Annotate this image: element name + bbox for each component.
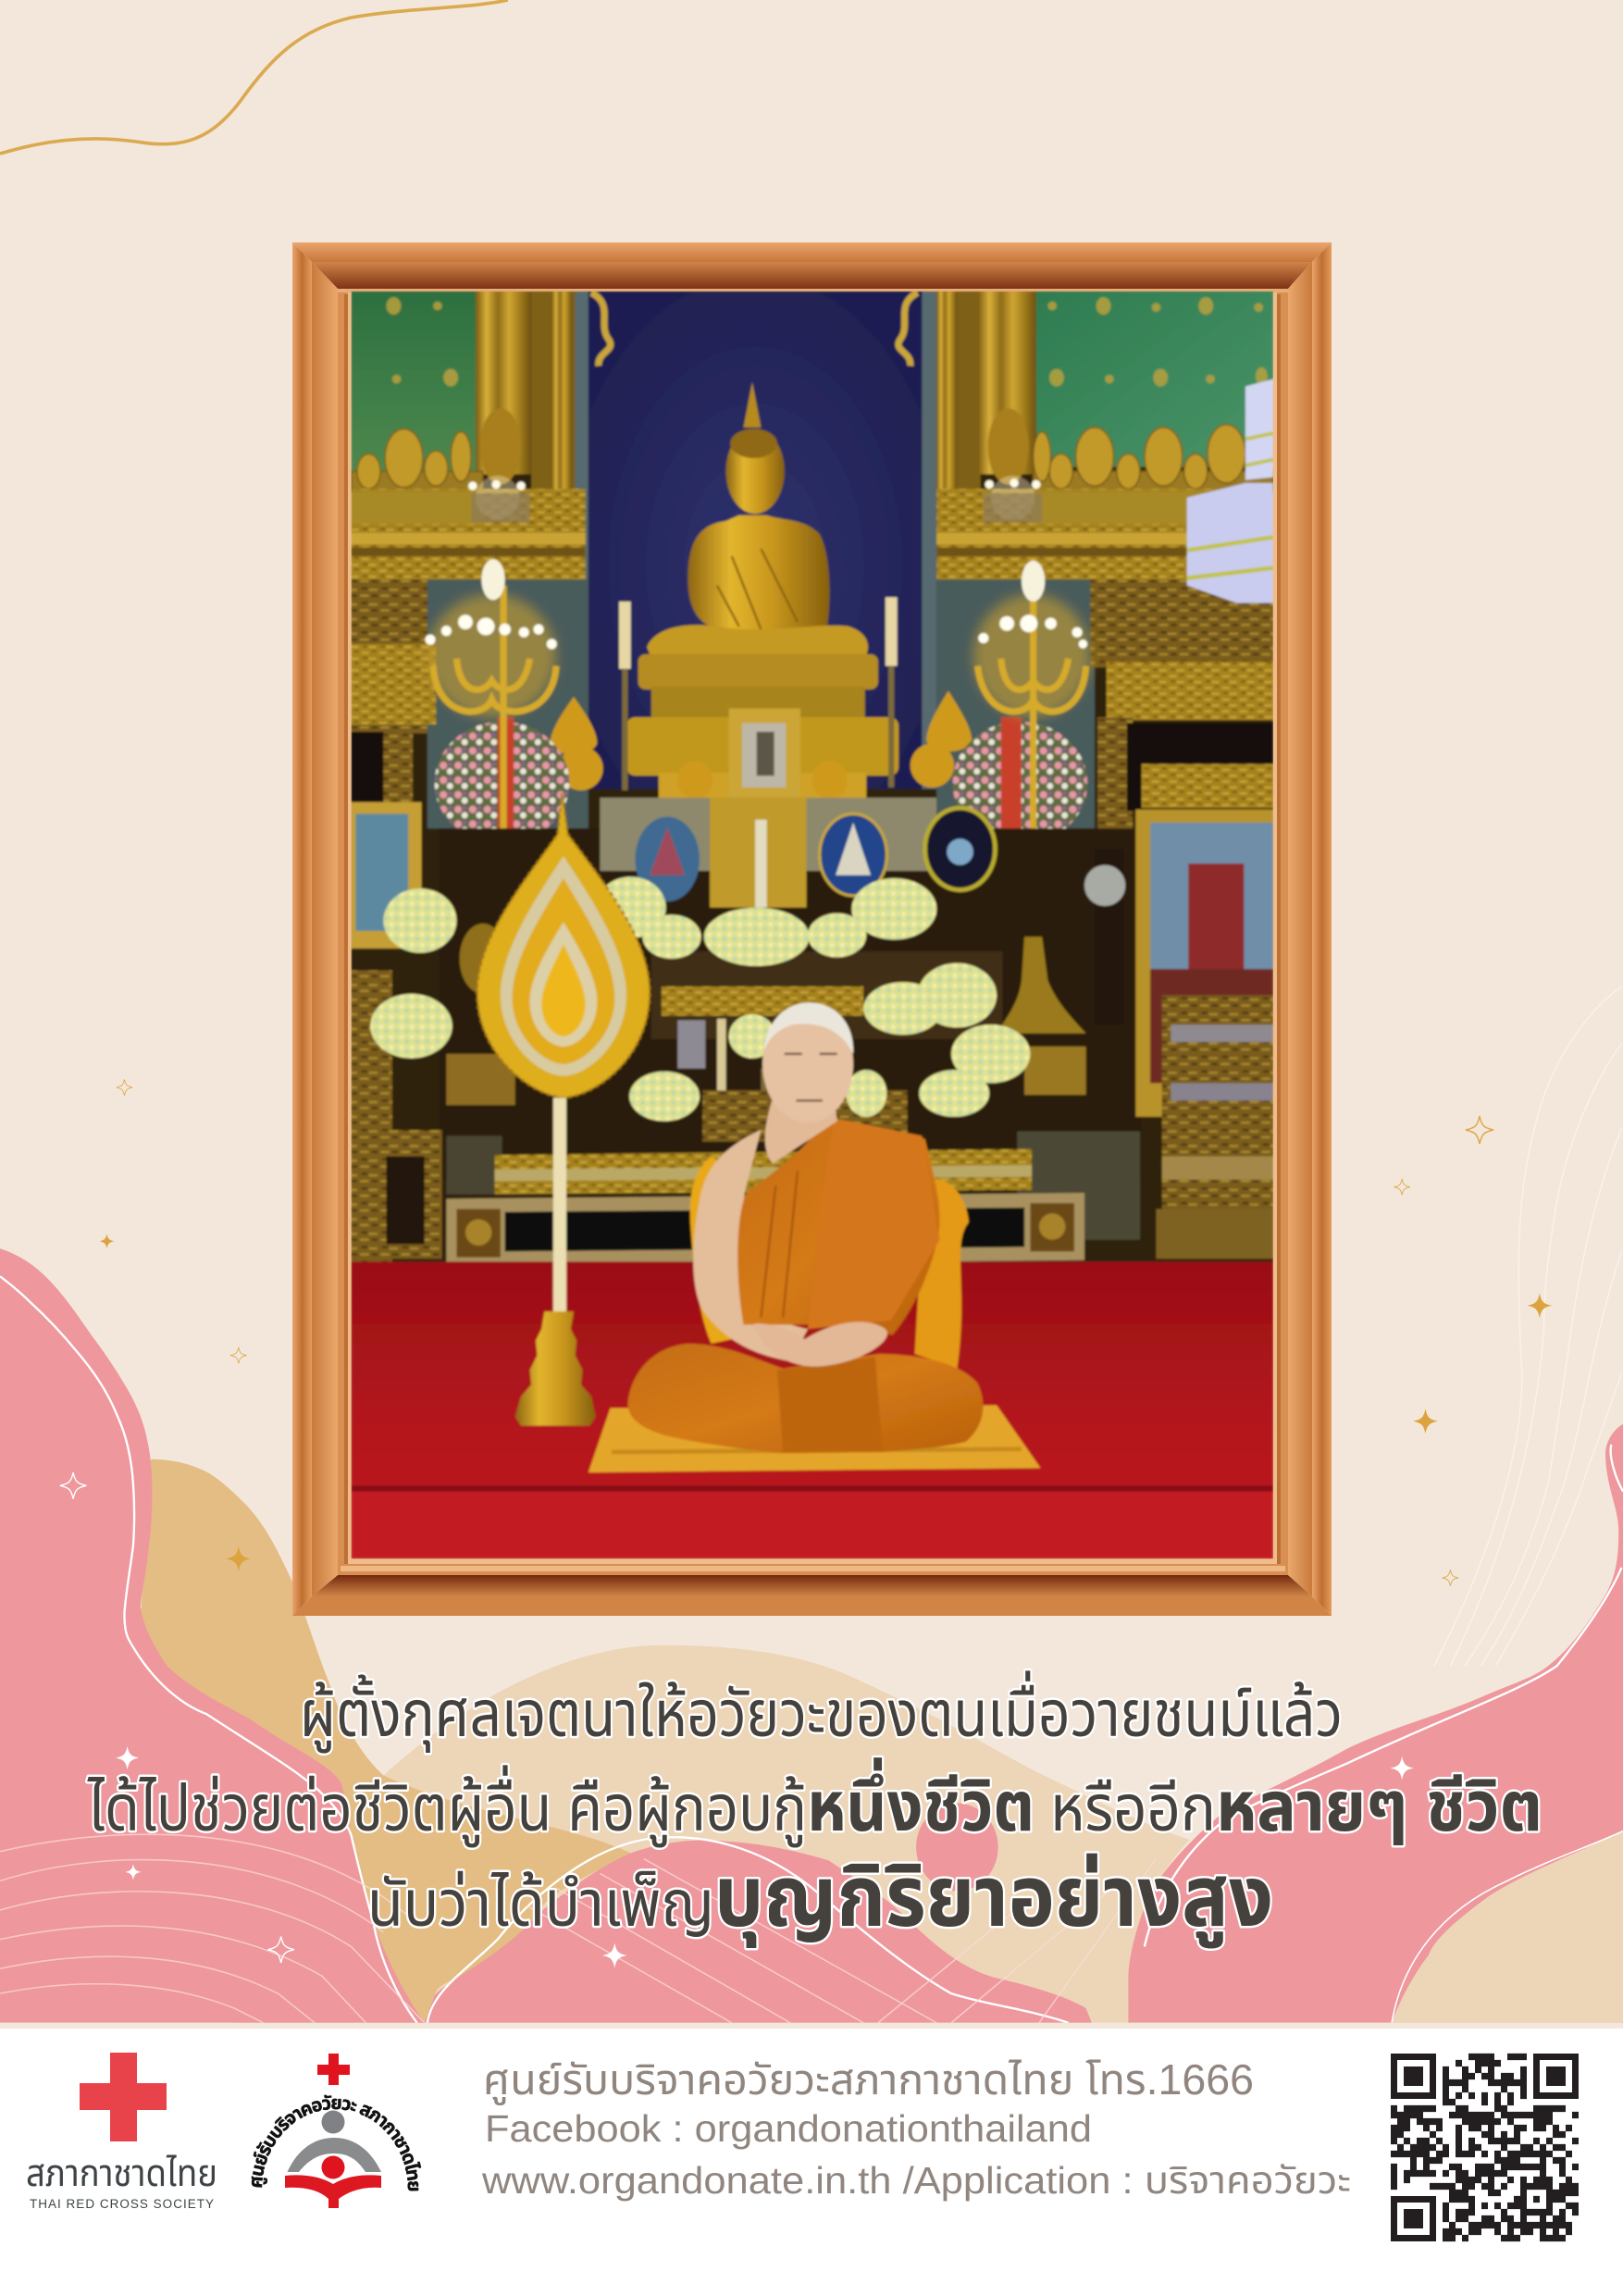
flower arrangements: [435, 722, 1087, 845]
beige hump: [383, 1645, 1190, 2023]
faint right contour lines: [1434, 987, 1621, 1666]
pink right blob: [1128, 1424, 1623, 2023]
outer bevel: [292, 242, 1332, 262]
altar step: [495, 1149, 1032, 1195]
right chandelier stand: [997, 937, 1086, 1034]
temple photograph with seated monk: [352, 292, 1273, 1558]
bottom-left concentric arcs: [0, 1834, 1156, 2023]
English name: THAI RED CROSS SOCIETY: [30, 2197, 214, 2211]
robe torso: [737, 1120, 939, 1334]
logo: Organ Donation Centre: [252, 2054, 422, 2208]
middle bevel: [312, 262, 1312, 289]
red figure and book: [322, 2156, 344, 2178]
head: [765, 1098, 837, 1163]
low ornate platform: [446, 1193, 1084, 1266]
lower altar dark backdrop: [439, 798, 1142, 1240]
logo: Thai Red Cross Society: [26, 2053, 217, 2211]
message line 3: [367, 1850, 1273, 1949]
gold outlined sparkles: [117, 1079, 1493, 1586]
white curve lines: [0, 1276, 1623, 2023]
fan pole and base: [515, 1098, 596, 1425]
contact line 1: ศูนย์รับบริจาคอวัยวะสภากาชาดไทย โทร.1666: [483, 2055, 1254, 2105]
message line 2: หนึ่งชีวิต: [807, 1757, 1035, 1846]
gilded columns: [476, 292, 1036, 788]
message line 3: บุญกิริยาอย่างสูง: [714, 1850, 1273, 1949]
pedestal: [626, 654, 898, 805]
flower balls: [370, 876, 1030, 1122]
white footer band: [0, 2029, 1623, 2296]
Thai name: สภากาชาดไทย: [26, 2153, 217, 2194]
message line 3: นับว่าได้บำเพ็ญ: [367, 1868, 714, 1940]
white sparkles: [60, 1472, 1414, 1967]
contact line 2: Facebook : organdonationthailand: [485, 2107, 1092, 2150]
palmette cresting: [352, 425, 1273, 491]
left arm and shoulder: [693, 1130, 808, 1361]
contact line 3: www.organdonate.in.th /Application : บริจาคอวัยวะ: [481, 2159, 1351, 2202]
photo base: [352, 292, 1273, 1264]
gold entablature: [352, 489, 1273, 579]
crossed legs: [628, 1344, 983, 1454]
curved centre name: ศูนย์รับบริจาคอวัยวะ สภากาชาดไทย: [252, 2095, 422, 2191]
altar candles: [619, 597, 898, 669]
folded cloth: [777, 1357, 883, 1452]
red carpet: [352, 1261, 1273, 1558]
gold blob: [131, 1459, 631, 2023]
navy niche: [588, 292, 922, 788]
pink centre hump: [425, 1841, 1092, 2023]
message line 2: หรืออีก: [1050, 1772, 1216, 1844]
gold wavy line top-left: [0, 0, 508, 154]
gold domes: [551, 691, 972, 800]
side walls and gold panels: [352, 579, 1273, 908]
beige right corner: [1392, 1831, 1623, 2023]
message line 2: ได้ไปช่วยต่อชีวิตผู้อื่น คือผู้กอบกู้: [87, 1765, 807, 1848]
inner lip: [338, 289, 1288, 1575]
shoulder sash: [808, 1118, 939, 1329]
carpet fold: [352, 1485, 1273, 1492]
QR code: [1391, 2054, 1579, 2241]
sparkles: [60, 1079, 1552, 1967]
main message: [87, 1670, 1542, 1949]
message line 2: [87, 1757, 1542, 1848]
red pillar candles: [498, 717, 1022, 846]
gold filled sparkles: [100, 1234, 1552, 1571]
contact details: [481, 2055, 1351, 2202]
small pink circle: [916, 1804, 998, 1891]
grey figure: [322, 2110, 344, 2134]
green walls: [352, 292, 1273, 481]
left and right mirrors and shrine furniture: [352, 802, 1273, 1263]
picture frame: [292, 242, 1332, 1616]
hanging lavender lamp: [1187, 379, 1273, 603]
cushion: [588, 1405, 1041, 1472]
red cross: [80, 2053, 167, 2141]
small upper chandeliers: [468, 476, 1042, 523]
Buddha statue: [647, 382, 868, 654]
pink left blob: [0, 1248, 425, 2023]
yellow under-robe: [690, 1156, 732, 1344]
niche ornaments: [591, 292, 918, 366]
emblems: [635, 808, 995, 908]
large chandeliers: [425, 559, 1090, 937]
message line 2: หลายๆ ชีวิต: [1216, 1768, 1542, 1846]
hands: [752, 1322, 887, 1367]
small red cross: [317, 2054, 350, 2085]
ceremonial fan: [477, 793, 650, 1098]
message line 1: ผู้ตั้งกุศลเจตนาให้อวัยวะของตนเมื่อวายชนม์แล้ว: [300, 1670, 1343, 1754]
seated monk: [588, 1002, 1041, 1472]
